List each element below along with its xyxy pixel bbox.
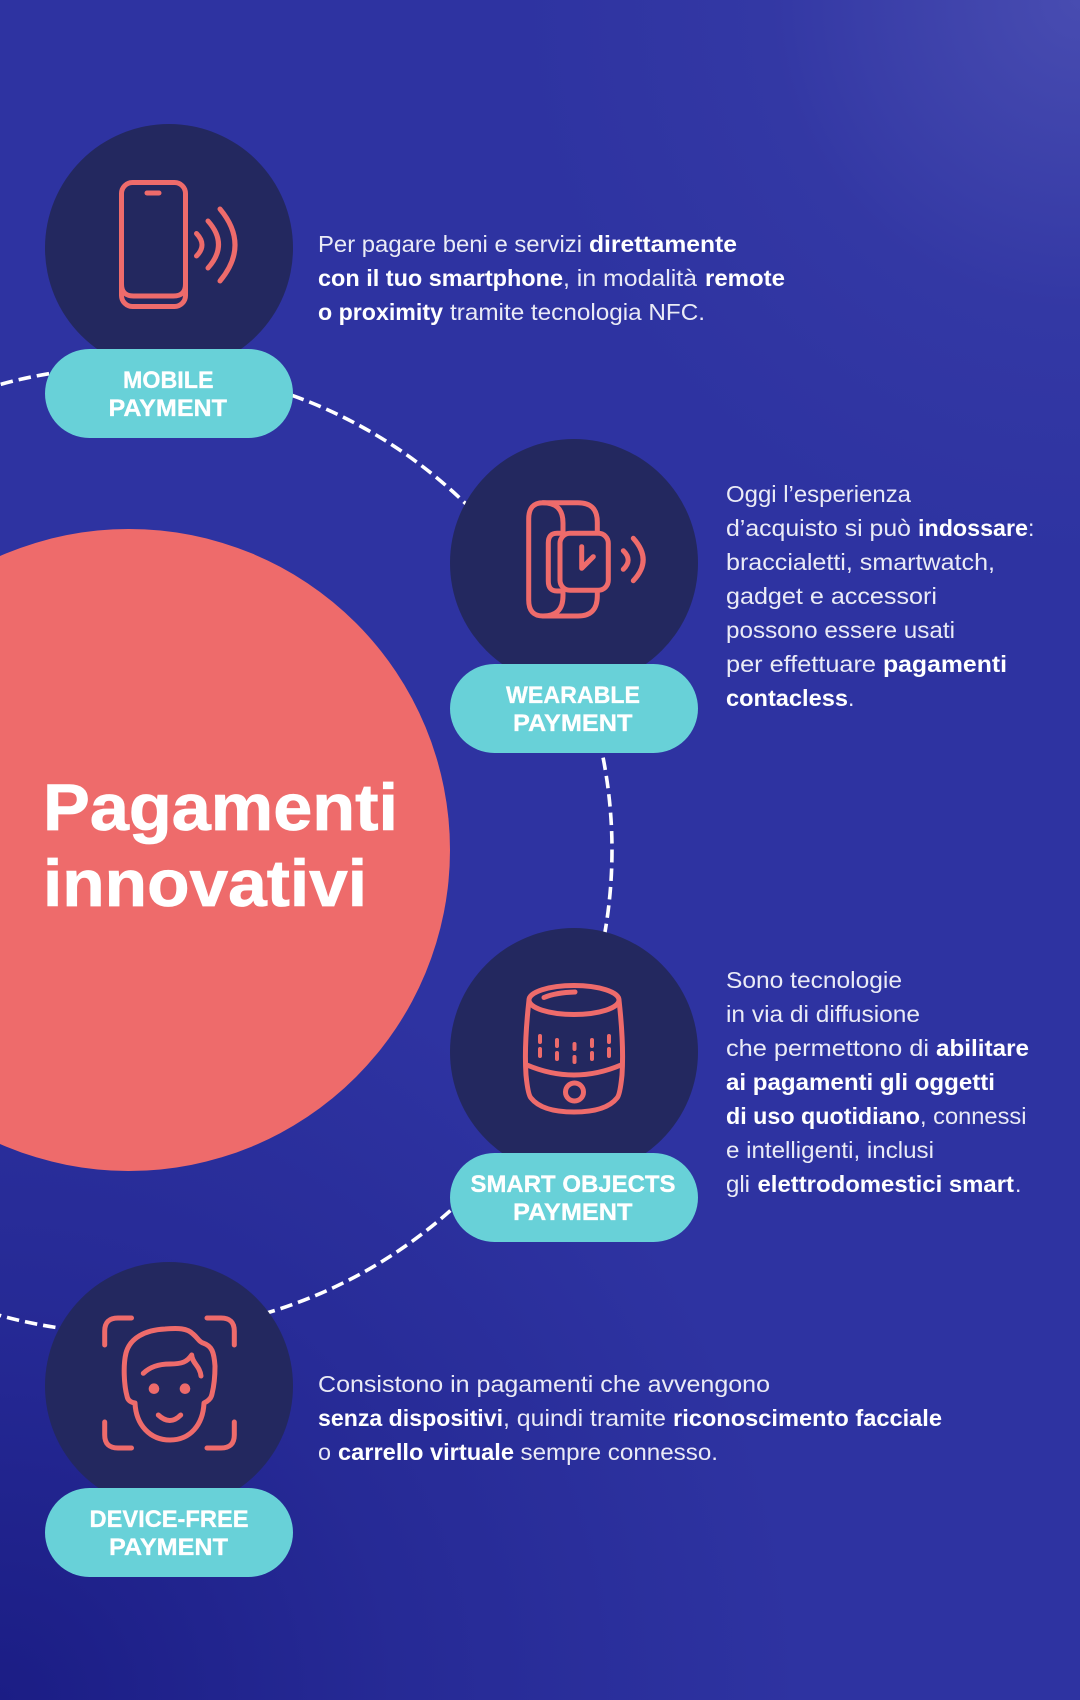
label pill: wearable payment bbox=[450, 664, 698, 753]
panel: smart objects payment bbox=[450, 928, 1029, 1242]
description: mobile payment: con il tuo smartphone bbox=[318, 265, 563, 291]
label pill: smart objects payment bbox=[450, 1153, 698, 1242]
label pill: wearable payment: PAYMENT bbox=[513, 710, 633, 737]
description: mobile payment: direttamente bbox=[589, 231, 737, 257]
label pill: device-free payment bbox=[45, 1488, 293, 1577]
description: device-free payment: , quindi tramite bbox=[503, 1405, 666, 1431]
description: mobile payment: Per pagare beni e servizi bbox=[318, 231, 582, 257]
description: smart objects payment: gli bbox=[726, 1171, 750, 1197]
label pill: mobile payment bbox=[45, 349, 293, 438]
description: wearable payment: indossare bbox=[918, 515, 1028, 541]
label pill: device-free payment: DEVICE-FREE bbox=[90, 1506, 248, 1533]
description: mobile payment: remote bbox=[705, 265, 785, 291]
icon: face recognition bbox=[105, 1318, 234, 1448]
description: mobile payment: tramite tecnologia NFC. bbox=[450, 299, 705, 325]
description: wearable payment: contacless bbox=[726, 685, 848, 711]
central circle with title: Pagamenti bbox=[43, 770, 398, 844]
description: device-free payment: carrello virtuale bbox=[338, 1439, 514, 1465]
description: device-free payment: sempre connesso. bbox=[520, 1439, 718, 1465]
panel: device-free payment bbox=[45, 1262, 942, 1577]
description: smart objects payment: . bbox=[1015, 1171, 1021, 1197]
description: wearable payment: per effettuare bbox=[726, 651, 876, 677]
label pill: smart objects payment: PAYMENT bbox=[513, 1199, 633, 1226]
description: smart objects payment: elettrodomestici smart bbox=[758, 1171, 1014, 1197]
label pill: device-free payment: PAYMENT bbox=[109, 1534, 228, 1561]
panel: mobile payment bbox=[45, 124, 785, 438]
description: smart objects payment: in via di diffusione bbox=[726, 1001, 920, 1027]
icon: smartphone with contactless waves bbox=[122, 182, 235, 306]
icon: smartwatch with contactless waves bbox=[529, 503, 643, 616]
central circle with title bbox=[0, 529, 450, 1171]
description: mobile payment bbox=[318, 231, 785, 325]
panel: wearable payment bbox=[450, 439, 1034, 753]
description: mobile payment: , in modalità bbox=[563, 265, 697, 291]
description: wearable payment: possono essere usati bbox=[726, 617, 955, 643]
description: smart objects payment: e intelligenti, inclusi bbox=[726, 1137, 934, 1163]
description: wearable payment: . bbox=[848, 685, 854, 711]
description: device-free payment: riconoscimento facciale bbox=[673, 1405, 942, 1431]
description: mobile payment: o proximity bbox=[318, 299, 443, 325]
description: device-free payment: senza dispositivi bbox=[318, 1405, 503, 1431]
description: device-free payment bbox=[318, 1371, 942, 1465]
label pill: wearable payment: WEARABLE bbox=[506, 682, 640, 709]
description: wearable payment: Oggi l’esperienza bbox=[726, 481, 911, 507]
description: smart objects payment: , connessi bbox=[920, 1103, 1026, 1129]
description: smart objects payment: Sono tecnologie bbox=[726, 967, 902, 993]
description: wearable payment bbox=[726, 481, 1034, 711]
icon: smart speaker bbox=[525, 986, 623, 1112]
description: wearable payment: braccialetti, smartwatch, bbox=[726, 549, 995, 575]
description: wearable payment: gadget e accessori bbox=[726, 583, 937, 609]
description: smart objects payment bbox=[726, 967, 1029, 1197]
description: smart objects payment: abilitare bbox=[936, 1035, 1029, 1061]
central circle with title: innovativi bbox=[43, 846, 367, 920]
description: wearable payment: d’acquisto si può bbox=[726, 515, 911, 541]
description: smart objects payment: che permettono di bbox=[726, 1035, 929, 1061]
description: smart objects payment: ai pagamenti gli oggetti bbox=[726, 1069, 995, 1095]
label pill: smart objects payment: SMART OBJECTS bbox=[470, 1171, 676, 1198]
label pill: mobile payment: MOBILE bbox=[123, 367, 214, 394]
dashed orbit ring bbox=[0, 367, 612, 1333]
description: device-free payment: Consistono in pagamenti che avvengono bbox=[318, 1371, 770, 1397]
description: wearable payment: : bbox=[1028, 515, 1034, 541]
label pill: mobile payment: PAYMENT bbox=[108, 395, 227, 422]
description: wearable payment: pagamenti bbox=[883, 651, 1007, 677]
description: smart objects payment: di uso quotidiano bbox=[726, 1103, 920, 1129]
description: device-free payment: o bbox=[318, 1439, 331, 1465]
